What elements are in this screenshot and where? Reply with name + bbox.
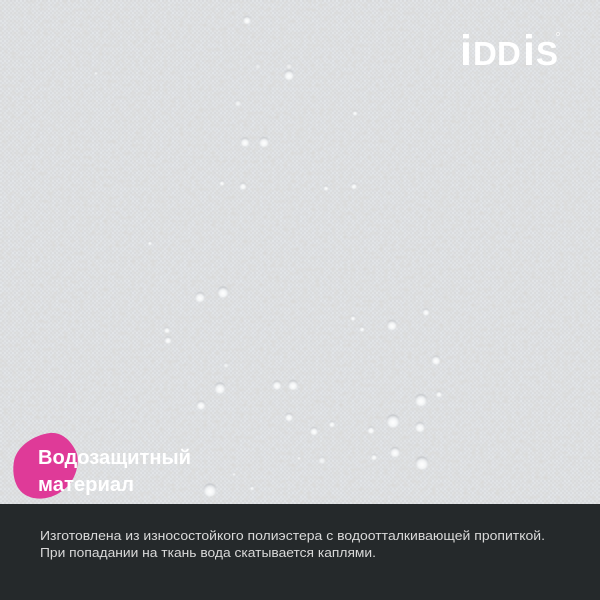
heading: waterproof material: материал [38, 474, 134, 496]
heading: waterproof material: Водозащитный [38, 447, 191, 469]
logo: iddis: D [497, 35, 521, 72]
pink blob badge [13, 433, 78, 499]
dark footer panel [0, 504, 600, 600]
logo: iddis: i [460, 27, 472, 75]
heading: waterproof material [38, 447, 191, 496]
logo: iddis [460, 27, 560, 75]
water droplets [94, 16, 442, 496]
description text: При попадании на ткань вода скатывается каплями. [40, 545, 376, 560]
logo: iddis: D [473, 35, 497, 72]
description text: Изготовлена из износостойкого полиэстера с водоотталкивающей пропиткой. [40, 528, 545, 543]
description text [40, 528, 545, 560]
logo: iddis: i [523, 27, 535, 75]
logo: iddis: S [536, 35, 558, 72]
